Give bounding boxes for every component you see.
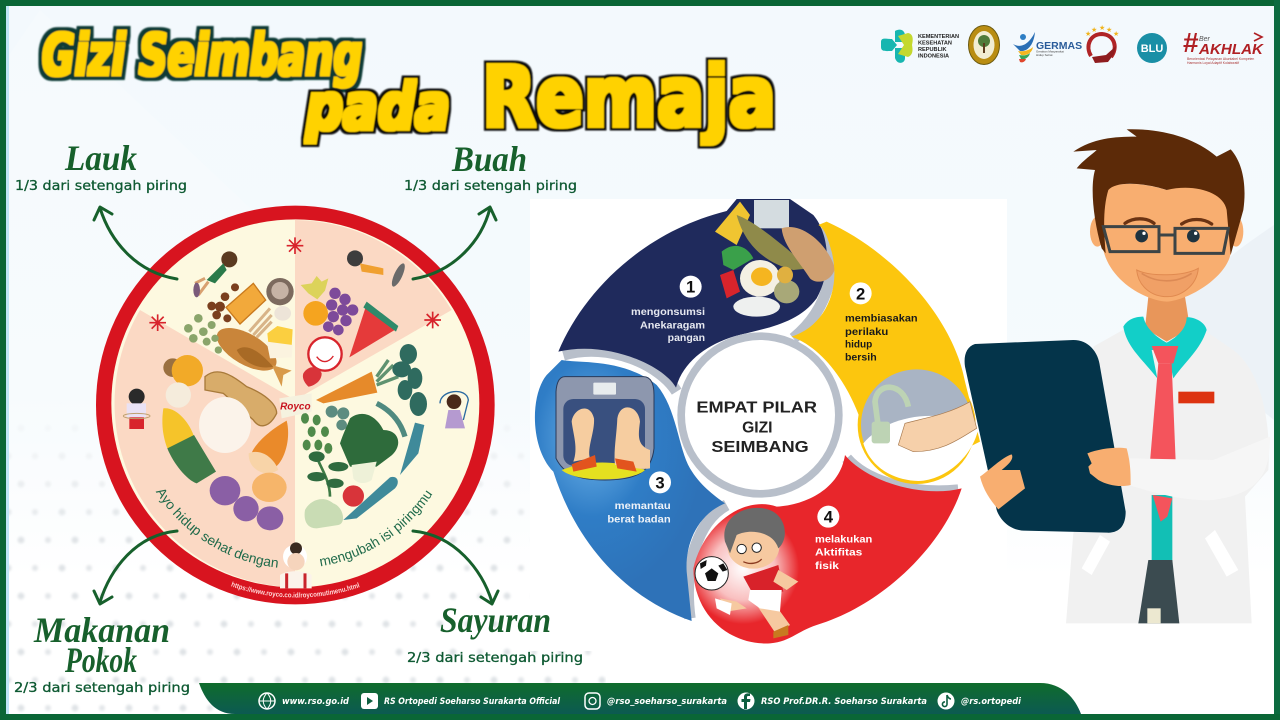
logo: GERMAS: Gerakan Masyarakat — [1036, 50, 1064, 54]
logo: BLU — [1137, 33, 1167, 63]
pillar 1 segment — [558, 199, 835, 388]
plate slogan: Ayo hidup sehat dengan — [156, 490, 278, 568]
child: girl left — [193, 251, 237, 297]
number badge 1: 1 — [686, 278, 695, 297]
footer: facebook — [738, 692, 927, 710]
label: Sayuran: Sayuran — [440, 600, 551, 640]
doctor character — [965, 129, 1270, 623]
pillar 4 text: fisik — [815, 561, 839, 572]
vegetables (sayuran) — [301, 344, 427, 528]
arrow: to Makanan Pokok — [94, 531, 177, 604]
tomato — [343, 485, 364, 507]
number badge 2 — [850, 282, 872, 304]
plate url: https://www.royco.co.id/roycomutimenu.html — [231, 582, 360, 599]
logo: Royco: Royco — [280, 401, 311, 412]
pillar 4 text: Aktifitas — [815, 548, 863, 559]
logo: BerAKHLAK: Berorientasi Pelayanan Akuntabel Kompeten — [1187, 57, 1254, 61]
hair — [1073, 129, 1245, 255]
footer bar — [199, 683, 1081, 714]
collar — [1123, 317, 1207, 378]
tempeh — [226, 283, 266, 324]
pillar 2 text: bersih — [845, 353, 877, 364]
cucumber — [343, 477, 398, 520]
rice — [199, 397, 251, 453]
logo: BerAKHLAK: AKHLAK — [1198, 41, 1264, 58]
pillar 3 text — [607, 501, 671, 525]
pillar 4 text — [815, 535, 872, 572]
logo: quality stars: ★ — [1085, 30, 1091, 38]
shirt and trousers — [1138, 495, 1179, 623]
pillar 3 text: berat badan — [607, 514, 671, 525]
left hand — [980, 454, 1025, 509]
label: Lauk: Lauk — [64, 138, 137, 178]
spinach leaves — [377, 344, 427, 437]
logo: Kementerian Kesehatan: KEMENTERIAN — [918, 34, 959, 40]
carrot — [316, 360, 398, 403]
red asterisks — [149, 237, 441, 331]
arrow: to Sayuran — [413, 531, 498, 604]
logo: Kementerian Kesehatan: REPUBLIK — [918, 47, 947, 53]
logo: Royco — [279, 393, 312, 418]
football — [695, 557, 728, 590]
lab coat — [1066, 317, 1269, 623]
glasses — [1103, 227, 1228, 253]
number badge 4 — [817, 506, 839, 528]
neck — [1145, 297, 1190, 342]
protein foods (lauk) — [184, 278, 294, 387]
staple foods (makanan pokok) — [162, 355, 288, 530]
logo: Kementerian Kesehatan: INDONESIA — [918, 54, 949, 60]
title — [42, 21, 776, 146]
purple yam — [210, 476, 283, 530]
tofu — [267, 326, 293, 358]
logo: quality stars: ★ — [1113, 30, 1119, 38]
coat pockets — [1082, 530, 1238, 577]
child: boy right — [347, 250, 407, 288]
label: Sayuran — [407, 600, 583, 666]
child: skipping girl — [440, 392, 468, 428]
noodles — [205, 372, 277, 426]
food illustration — [715, 200, 835, 317]
sleeve — [1128, 437, 1270, 500]
footer: youtube: RS Ortopedi Soeharso Surakarta Official — [384, 697, 561, 707]
label: Lauk — [15, 138, 187, 194]
clipboard — [965, 340, 1126, 533]
number badge 3 — [649, 471, 671, 493]
number badge 3: 3 — [655, 473, 665, 492]
title line 2 — [305, 48, 776, 146]
logo: BerAKHLAK: # — [1183, 27, 1199, 58]
logo: BerAKHLAK — [1183, 27, 1264, 65]
pillar 2 text: membiasakan — [845, 314, 918, 325]
pillar 1 text: mengonsumsi — [631, 307, 705, 318]
mushrooms — [266, 278, 294, 321]
pillar 4 segment — [693, 455, 962, 643]
gray swirl backing — [563, 227, 958, 618]
logo: GERMAS: GERMAS — [1036, 40, 1082, 52]
logo: quality stars: ★ — [1091, 26, 1097, 34]
footer: tiktok — [938, 692, 1022, 710]
logo: BLU: BLU — [1141, 43, 1163, 55]
arrow: to Buah — [413, 207, 496, 279]
institution logos — [881, 24, 1264, 65]
pillar 1 text: Anekaragam — [640, 320, 705, 331]
logo: Kementerian Kesehatan — [881, 30, 959, 63]
label: Buah — [404, 139, 577, 194]
peas bunch — [301, 406, 349, 454]
plate slogan: mengubah isi piringmu — [320, 490, 432, 566]
enoki — [249, 308, 272, 337]
arrow: to Lauk — [94, 207, 177, 279]
label: Buah: 1/3 dari setengah piring — [404, 179, 577, 194]
logo: Kementerian Kesehatan: KESEHATAN — [918, 40, 952, 46]
label: Lauk: 1/3 dari setengah piring — [15, 179, 187, 194]
label: Makanan Pokok: Pokok — [64, 640, 137, 680]
pillar 1 text — [631, 307, 705, 344]
title line 2: pada — [305, 71, 450, 145]
okra — [400, 423, 424, 475]
centre circle: SEIMBANG — [711, 439, 809, 456]
ears — [1090, 217, 1243, 247]
chef woman — [280, 542, 312, 588]
watermelon — [349, 302, 398, 357]
fish — [210, 319, 292, 387]
footer: website — [259, 693, 350, 709]
plate rim — [96, 206, 495, 604]
logo: quality stars: ★ — [1106, 26, 1112, 34]
logo: quality stars: ★ — [1099, 24, 1105, 32]
beard and smile — [1137, 268, 1198, 297]
logo: GERMAS: Hidup Sehat — [1036, 53, 1053, 57]
logo: RS Ortopedi — [968, 26, 1000, 64]
footer: instagram: @rso_soeharso_surakarta — [607, 697, 727, 707]
child: hula hoop boy — [123, 389, 150, 429]
pillar 1 text: pangan — [668, 333, 705, 344]
fruit (buah) — [301, 276, 398, 387]
title line 2: Remaja — [482, 48, 776, 146]
number badge 2: 2 — [856, 284, 865, 303]
pillar 3 segment — [535, 360, 725, 621]
eyes — [1135, 230, 1200, 242]
label: Buah: Buah — [451, 139, 527, 179]
footer: facebook: RSO Prof.DR.R. Soeharso Surakarta — [761, 697, 927, 707]
centre circle — [677, 332, 843, 498]
centre circle: EMPAT PILAR — [696, 399, 817, 416]
pillar 2 text — [845, 314, 918, 364]
pillar 3 text: memantau — [615, 501, 671, 512]
face — [1103, 184, 1231, 302]
leafy stem — [307, 451, 348, 497]
handwashing illustration — [859, 368, 978, 482]
footer: youtube — [361, 693, 561, 709]
boy with football illustration — [695, 508, 798, 638]
title line 1: Gizi Seimbang — [42, 21, 362, 89]
label: Sayuran: 2/3 dari setengah piring — [407, 651, 583, 666]
bathroom scale illustration — [556, 377, 654, 480]
strawberry — [303, 367, 322, 387]
logo: BerAKHLAK: Harmonis Loyal Adaptif Kolaboratif — [1187, 61, 1239, 65]
label: Makanan Pokok — [14, 610, 190, 696]
orange — [303, 301, 328, 326]
footer: instagram — [585, 693, 727, 709]
sweet potato — [249, 421, 288, 502]
star fruit — [301, 276, 328, 299]
pillar 4 text: melakukan — [815, 535, 872, 546]
bok choy — [340, 414, 398, 483]
corn — [162, 408, 216, 483]
number badge 1 — [680, 276, 702, 298]
panel: empat pilar gizi seimbang — [530, 199, 1007, 651]
pillar 2 segment — [792, 222, 980, 482]
name badge — [1178, 392, 1214, 403]
logo: BerAKHLAK: Ber — [1199, 36, 1211, 43]
logo: GERMAS — [1013, 32, 1082, 62]
pillar 2 text: hidup — [845, 340, 872, 351]
tubers — [163, 355, 203, 408]
footer: website: www.rso.go.id — [282, 697, 350, 707]
label: Makanan Pokok: Makanan — [33, 610, 170, 650]
plate slogan — [156, 490, 432, 568]
logo: quality stars — [1085, 24, 1119, 63]
label: Makanan Pokok: 2/3 dari setengah piring — [14, 681, 190, 696]
eyebrows — [1125, 219, 1212, 224]
right hand — [1087, 448, 1131, 486]
pillar 2 text: perilaku — [845, 327, 888, 338]
grapes — [323, 288, 358, 335]
centre circle: GIZI — [742, 419, 773, 436]
plate sectors — [111, 219, 479, 587]
apple — [308, 337, 342, 371]
lettuce — [305, 499, 343, 528]
plate infographic — [96, 206, 495, 604]
tie — [1150, 346, 1178, 522]
children illustrations — [123, 250, 468, 588]
footer: tiktok: @rs.ortopedi — [961, 697, 1022, 707]
number badge 4: 4 — [824, 508, 834, 527]
peas and beans — [184, 283, 239, 354]
